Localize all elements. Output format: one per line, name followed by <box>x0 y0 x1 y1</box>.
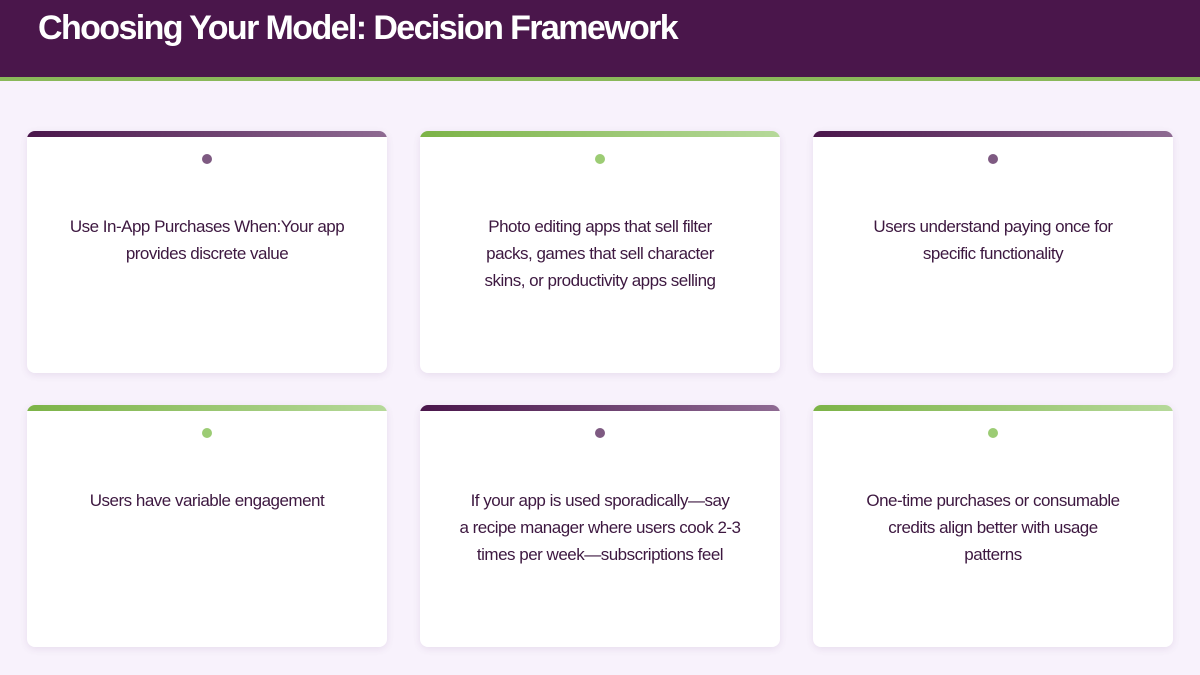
dot icon <box>202 154 212 164</box>
card text: Use In-App Purchases When:Your app provides discrete value <box>70 217 344 263</box>
header <box>0 0 1200 81</box>
card 5 <box>420 405 780 647</box>
card text: Users understand paying once for specific functionality <box>873 217 1113 263</box>
card text <box>459 491 741 564</box>
card text: a recipe manager where users cook 2-3 times per week—subscriptions feel <box>459 518 741 564</box>
card 2 <box>420 131 780 373</box>
card 6 <box>813 405 1173 647</box>
dot icon <box>595 428 605 438</box>
card text: If your app is used sporadically—say <box>471 491 729 510</box>
dot icon <box>595 154 605 164</box>
card text: Users have variable engagement <box>90 491 324 510</box>
card text: One-time purchases or consumable credits align better with usage patterns <box>866 491 1120 564</box>
card 3 <box>813 131 1173 373</box>
card text: Photo editing apps that sell filter packs, games that sell character skins, or productivity apps selling <box>484 217 716 290</box>
card 1 <box>27 131 387 373</box>
dot icon <box>988 154 998 164</box>
dot icon <box>988 428 998 438</box>
card 4 <box>27 405 387 647</box>
dot icon <box>202 428 212 438</box>
title: Choosing Your Model: Decision Framework <box>38 9 677 47</box>
